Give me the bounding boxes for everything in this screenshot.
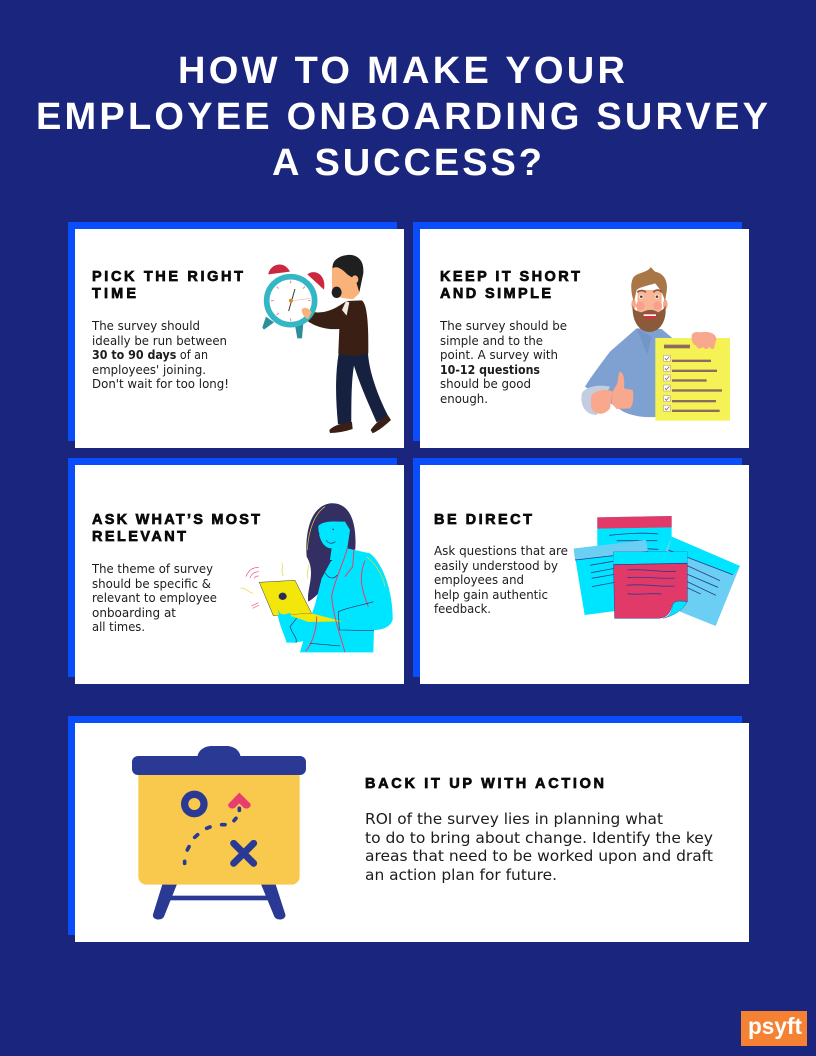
text: be direct: feedback. [434,602,491,616]
text: back it up with action [365,810,713,884]
heading: be direct: BE DIRECT [434,512,532,528]
text: ask what's most relevant: relevant to employee [92,591,217,605]
text: keep it short and simple: 10-12 questions [440,363,540,377]
text: keep it short and simple: The survey should be [439,319,567,333]
text: ask what's most relevant: all times. [92,620,145,634]
text: pick the right time: employees' joining. [92,363,206,377]
logo: psyft [741,1011,807,1046]
heading: keep it short and simple [440,269,580,302]
text: ask what's most relevant [91,562,217,634]
icon: strategy board [132,746,306,919]
heading: keep it short and simple: AND SIMPLE [440,286,551,302]
text: pick the right time: 30 to 90 days of an [92,348,208,362]
text: pick the right time: Don't wait for too long! [92,377,229,391]
heading: ask what's most relevant: RELEVANT [92,529,186,545]
title: HOW TO MAKE YOUR [178,50,625,92]
heading: pick the right time: TIME [92,286,136,302]
icon: sticky notes [574,516,740,626]
text: be direct: help gain authentic [434,588,548,602]
panel: keep it short and simple [413,222,749,448]
text: pick the right time: The survey should [91,319,200,333]
text: pick the right time [91,319,229,391]
text: ask what's most relevant: The theme of survey [91,562,213,576]
panel: back it up with action [68,716,749,942]
heading: pick the right time [92,269,243,302]
heading: keep it short and simple: KEEP IT SHORT [440,269,580,285]
title [36,50,768,184]
text: ask what's most relevant: should be specific & [92,577,211,591]
icon: bearded man with checklist [581,267,730,421]
text: pick the right time: ideally be run between [92,334,227,348]
text: keep it short and simple: point. A survey with [440,348,558,362]
text: be direct [434,544,568,616]
title: EMPLOYEE ONBOARDING SURVEY [36,96,768,138]
logo: psyft: psyft [748,1013,802,1039]
text: keep it short and simple [439,319,567,406]
text: be direct: employees and [434,573,524,587]
heading: ask what's most relevant [92,512,260,545]
text: keep it short and simple: should be good [440,377,531,391]
heading: pick the right time: PICK THE RIGHT [92,269,243,285]
text: keep it short and simple: simple and to the [440,334,543,348]
panel: pick the right time [68,222,404,448]
icon: man holding alarm clock [262,255,391,433]
text: back it up with action: ROI of the survey lies in planning what [365,810,663,828]
text: be direct: Ask questions that are [434,544,568,558]
heading: back it up with action: BACK IT UP WITH ACTION [365,776,604,792]
panel: ask what's most relevant [68,458,404,684]
panel: be direct [413,458,749,684]
icon: woman with laptop [241,503,393,652]
text: back it up with action: to do to bring about change. Identify the key [365,829,713,847]
text: back it up with action: areas that need to be worked upon and draft [365,847,713,865]
text: ask what's most relevant: onboarding at [92,606,176,620]
text: keep it short and simple: enough. [440,392,488,406]
heading: ask what's most relevant: ASK WHAT’S MOST [92,512,260,528]
title: A SUCCESS? [272,142,542,184]
text: back it up with action: an action plan for future. [365,866,557,884]
text: be direct: easily understood by [434,559,558,573]
